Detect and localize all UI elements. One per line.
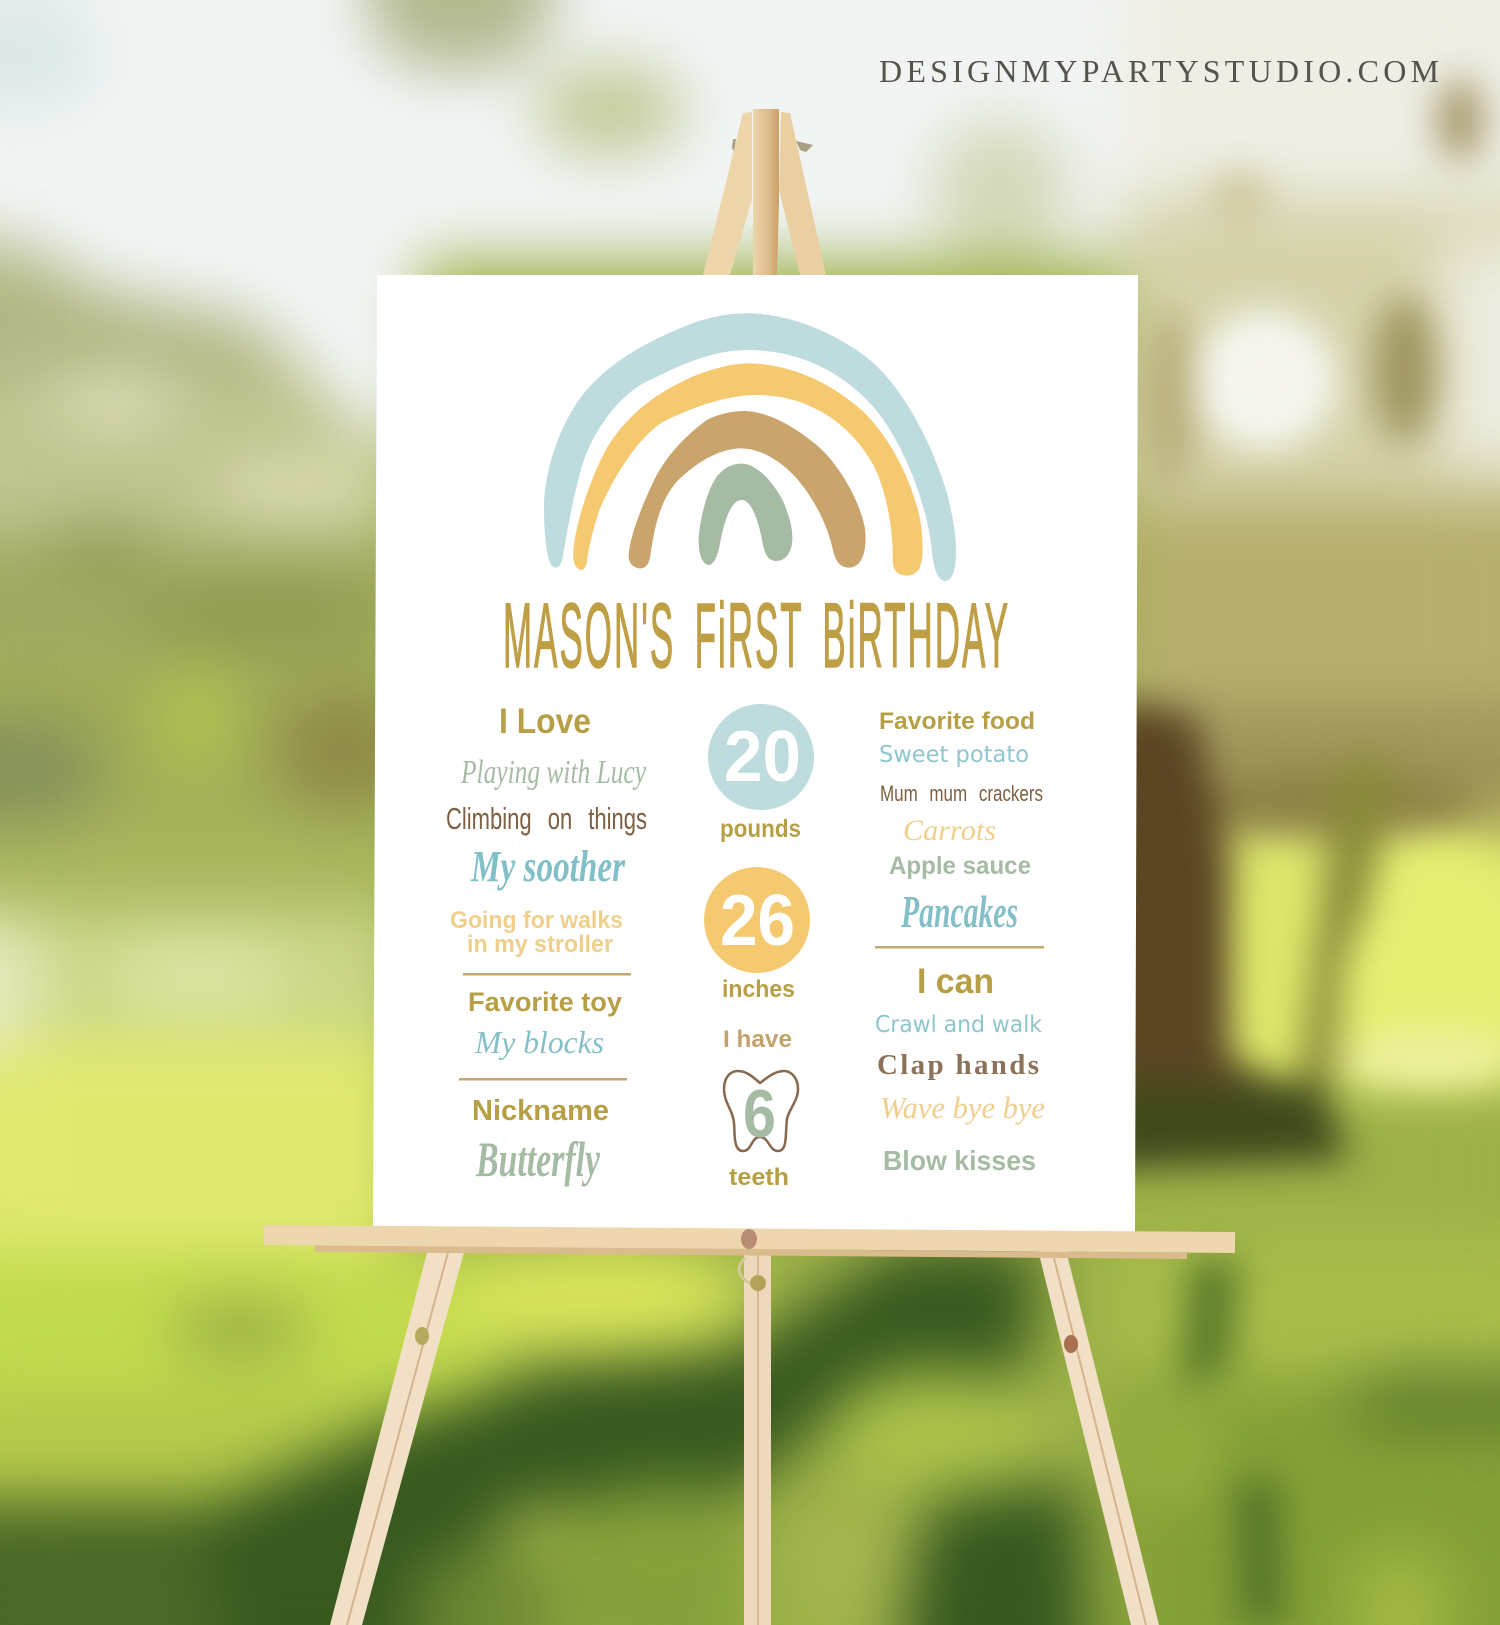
easel shelf [264,1225,1235,1259]
heading: Favorite toy: Favorite toy [468,987,622,1017]
circle: 26 inches: 26 [720,881,795,961]
title: MASON'S FiRST BiRTHDAY [503,584,1008,687]
easel right leg [1038,1250,1159,1625]
easel center leg [744,1250,771,1625]
item: Going for walks in my stroller: Going for walks [450,907,623,934]
sign board [373,275,1138,1232]
left leg rivet [415,1327,429,1345]
circle: 20 pounds [708,704,814,810]
label: pounds: pounds [720,815,801,843]
brown arc [629,411,866,568]
label: inches: inches [722,976,795,1003]
heading: Favorite food: Favorite food [879,708,1035,735]
item: My blocks: My blocks [474,1024,604,1060]
item: Mum mum crackers: Mum mum crackers [880,781,1043,806]
item: My soother: My soother [470,842,626,891]
item: Wave bye bye: Wave bye bye [880,1090,1045,1125]
column: favorites and skills [875,708,1045,1176]
item: Apple sauce: Apple sauce [889,852,1031,880]
column: stats [704,704,814,1191]
label: teeth: teeth [729,1164,789,1191]
circle: 26 inches [704,867,810,973]
icon: tooth with 6 [724,1071,798,1152]
easel top [703,109,826,275]
heading: I can: I can [917,962,994,1001]
column: I love [446,702,647,1187]
heading: Nickname: Nickname [472,1095,609,1127]
heading: I Love: I Love [499,702,591,741]
watermark: DESIGNMYPARTYSTUDIO.COM [879,53,1439,89]
easel left leg [330,1245,466,1625]
blurred tree trunks and highlights [1100,78,1500,1625]
circle: 20 pounds: 20 [724,717,801,797]
blue arc [544,313,956,581]
green arc [699,464,792,565]
label: I have: I have [723,1026,792,1053]
item: Carrots: Carrots [903,814,996,847]
yellow arc [573,363,923,576]
item: Blow kisses: Blow kisses [883,1145,1036,1176]
item continuation: in my stroller [467,931,613,958]
item: Sweet potato: Sweet potato [879,742,1029,768]
right leg rivet [1064,1335,1078,1353]
hook [739,1258,766,1291]
shelf rivet [741,1229,757,1249]
item: Crawl and walk: Crawl and walk [875,1012,1043,1038]
item: Pancakes: Pancakes [900,886,1018,937]
item: Clap hands: Clap hands [877,1049,1039,1081]
item: Climbing on things: Climbing on things [446,801,647,836]
item: Playing with Lucy: Playing with Lucy [460,754,647,791]
icon: tooth with 6: 6 [743,1076,776,1152]
rainbow [544,313,956,581]
item: Butterfly: Butterfly [475,1131,601,1187]
